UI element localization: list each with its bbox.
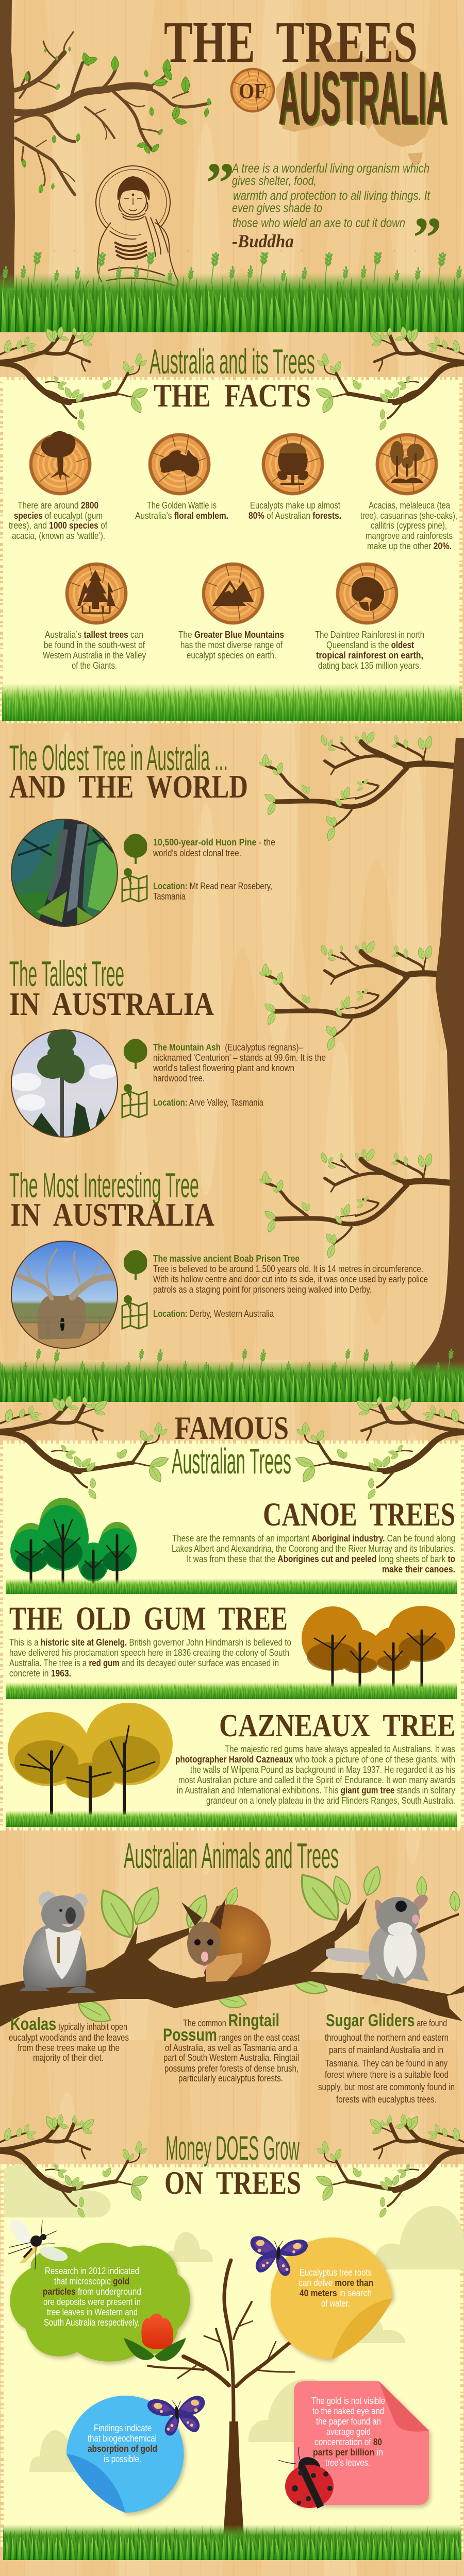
text: Eucalypts make up almost [250,500,340,511]
bubble: research: South Australia respectively. [44,2317,140,2328]
bubble: gold concentration [294,2381,429,2505]
grass band [3,2524,461,2560]
icon: butterfly [250,2229,311,2280]
bubble: findings: absorption of gold [88,2444,157,2454]
map of Australia behind title [276,40,434,166]
leaves [74,1864,461,2028]
fact: eucalypts 80 percent [248,433,341,521]
illustration: yellow trees [8,1703,173,1814]
heading: THE OLD GUM TREE [9,1600,288,1637]
log badge: of [230,68,275,112]
heading: on trees: ON TREES [164,2164,301,2201]
text: concrete in 1963. [9,1668,71,1679]
branch: most interesting tree [258,1147,461,1259]
block: tallest tree [9,954,326,1138]
log badge: of: OF [239,80,267,104]
text: callitris (cypress pine), [371,520,447,531]
bubble: roots: Eucalyptus tree roots [300,2267,372,2278]
text: boab prison tree: patrols as a staging point for prisoners being walked into Derby. [153,1284,372,1295]
bubble: gold concentration: concentration of 80 [314,2437,382,2447]
branches left and right [0,326,464,431]
tree with branches at left [0,0,211,289]
icon: tree [29,431,91,495]
text: location: Location: Derby, Western Australia [153,1309,274,1319]
photo: boab prison tree [10,1241,119,1349]
text: make their canoes. [382,1564,455,1574]
text: Queensland is the oldest [326,640,414,650]
block: oldest tree [9,738,275,927]
bubble: findings: that biogeochemical [88,2433,157,2444]
quotation marks: ” [413,206,442,270]
text: Western Australia in the Valley [43,650,146,660]
text: be found in the south-west of [44,640,145,650]
old gum tree [6,1600,457,1699]
grass band [6,1579,457,1594]
branch: tallest tree [258,940,461,1052]
subheading: IN AUSTRALIA [10,1197,214,1233]
text [315,630,424,671]
text: location: Tasmania [153,891,186,902]
text [43,630,146,671]
animal: sugar glider [326,1895,429,1984]
text: The Golden Wattle is [147,500,217,511]
text: mountain ash: hardwood tree. [153,1073,205,1083]
section: intro header [0,0,464,332]
text [360,500,457,551]
bubble: research: that microscopic gold [54,2276,129,2286]
bubble: findings: is possible. [104,2454,141,2464]
icon: map [122,1084,147,1117]
icon: ladybird [278,2447,334,2508]
text: boab prison tree [153,1253,428,1295]
text: ringtail possum: The common Ringtail [183,2011,279,2030]
bubble: research: Research in 2012 indicated [45,2266,139,2276]
icon: tree [124,1039,147,1069]
photo: huon pine [10,819,119,927]
text: mountain ash: nicknamed 'Centurion' – stands at 99.6m. It is the [153,1053,326,1063]
quotation marks: ” [206,151,235,215]
quote text: even gives shade to [232,201,322,215]
quote text: gives shelter, food, [232,174,317,188]
block: most interesting tree [9,1166,428,1349]
clouds [4,2165,464,2472]
bubble: gold concentration: to the naked eye and [312,2406,384,2416]
fact: tallest trees [43,563,146,671]
bubble: gold concentration: parts per billion in [313,2447,383,2458]
text: location: Location: Mt Read near Rosebery, [153,881,272,891]
block: most interesting tree: The Most Interesting Tree [9,1166,199,1205]
icon: globe [336,563,398,624]
fact: daintree rainforest [315,563,424,671]
text: koalas: from these trees make up the [18,2043,120,2053]
text [9,1637,291,1679]
icon: mountains [202,563,264,624]
heading: famous: FAMOUS [175,1410,289,1446]
big branch [0,1898,464,2027]
bubble: research: ore deposits were present in [43,2297,141,2307]
center tree [148,2260,294,2558]
cazneaux tree [6,1703,457,1827]
bubble: findings [67,2396,184,2513]
grass band [0,1349,464,1402]
animal: koala [20,1891,96,1993]
section: animals and trees [0,1836,464,2105]
text: The Greater Blue Mountains [178,630,284,640]
text: has the most diverse range of [180,640,283,650]
text: koalas: eucalypt woodlands and the leaves [9,2032,129,2043]
fact: other species [360,433,457,551]
text [135,500,228,521]
text: huon pine: world's oldest clonal tree. [153,848,241,858]
bubble: roots: can delve more than [299,2278,373,2288]
text: Australia. The tree is a red gum and its decayed outer surface was encased in [9,1658,279,1668]
block: tallest tree: The Tallest Tree [9,954,124,994]
subheading: AND THE WORLD [9,769,248,805]
text [172,1533,455,1574]
text: Australia’s floral emblem. [135,511,228,521]
text: ringtail possum: particularly eucalyptus forests. [178,2073,283,2083]
text: huon pine [153,837,275,858]
subheading: IN AUSTRALIA [9,986,214,1022]
text: ringtail possum [163,2011,300,2083]
text: sugar gliders: forests with eucalyptus trees. [336,2094,437,2105]
photo: mountain ash [10,1028,119,1138]
branches left and right [0,2114,464,2219]
text: huon pine: 10,500-year-old Huon Pine - the [153,837,275,848]
text: boab prison tree: The massive ancient Boab Prison Tree [153,1253,300,1264]
text: koalas [9,2014,129,2063]
fact: golden wattle [135,433,228,521]
text: species of eucalypt (gum [14,511,103,521]
text: tropical rainforest on earth, [316,650,423,660]
grass band [0,250,464,332]
text: have delivered his proclamation speech here in 1836 creating the colony of South [9,1648,289,1658]
text: make up the other 20%. [367,541,452,551]
text: in Australian and International exhibitions. This giant gum tree stands in solitary [177,1785,455,1795]
text: of the Giants. [72,660,117,671]
text: It was from these that the Aborigines cut and peeled long sheets of bark to [187,1554,455,1564]
quote text [231,161,430,230]
fact: eucalypt species [9,431,108,541]
panel: the facts [0,326,464,721]
icon: map [122,1295,147,1329]
text: sugar gliders: Sugar Gliders are found [326,2011,447,2030]
bubble: roots [271,2238,392,2359]
grass band [2,683,462,721]
icon: Australia map [148,433,210,495]
cream panel [3,1444,461,1827]
heading: the facts: THE FACTS [154,377,311,414]
text [175,1744,455,1806]
grass band [6,1682,457,1699]
text: ringtail possum: part of South Western Australia. Ringtail [163,2053,299,2063]
text: location: Location: Arve Valley, Tasmania [153,1097,264,1108]
text: ringtail possum: Possum ranges on the east coast [163,2025,300,2045]
buddha figure [86,166,178,299]
text: trees), and 1000 species of [9,520,108,531]
text: ringtail possum: possums prefer forests of dense brush, [164,2063,299,2074]
animal: possum [181,1899,271,1982]
text: eucalypt species on earth. [187,650,276,660]
section: record trees with trunk [0,730,464,1402]
bubble: research: tree leaves in Western and [47,2307,138,2317]
text: mountain ash [153,1042,326,1083]
quotation marks [206,151,442,270]
illustration: green trees [10,1498,137,1583]
cream panel [3,380,459,720]
bubble: gold concentration: tree’s leaves. [325,2458,370,2468]
bubble: roots: 40 meters in search [300,2288,372,2298]
quote text: those who wield an axe to cut it down [233,216,405,230]
text: sugar gliders [318,2011,455,2105]
branch: oldest tree [258,730,461,842]
text: Australia’s tallest trees can [45,630,143,640]
bubble: findings: Findings indicate [94,2423,152,2433]
panel: famous Australian trees [0,1395,464,1827]
icon: map [122,868,147,902]
text: koalas: majority of their diet. [33,2053,104,2063]
icon: pines [65,563,127,624]
cream panel [4,2167,460,2549]
bubble: gold concentration: average gold [326,2427,371,2437]
panel: money does grow on trees [0,2114,464,2560]
text: dating back 135 million years. [318,660,421,671]
panel: famous Australian trees: Australian Trees [172,1441,291,1481]
trunk at right [405,738,464,1381]
bubble: gold concentration: the paper found an [316,2416,381,2427]
icon: eucalypt tree [262,433,324,495]
text [248,500,341,521]
text: The Daintree Rainforest in north [315,630,424,640]
grass band [6,1810,457,1827]
panel: money does grow on trees: Money DOES Grow [165,2129,300,2167]
text: mountain ash: The Mountain Ash (Eucalyptus regnans)– [153,1042,303,1053]
bubble: research [10,2243,190,2362]
canoe trees [6,1496,457,1594]
text [178,630,284,660]
text: location [153,881,272,902]
bubble: roots: of water. [321,2298,350,2309]
bubble: research: particles from underground [43,2286,141,2297]
branches left and right [0,1395,464,1500]
text: mountain ash: world's tallest flowering plant and known [153,1063,294,1073]
quote attribution: -Buddha [232,231,294,251]
text: These are the remnants of an important Aboriginal industry. Can be found along [172,1533,455,1544]
text: ringtail possum: of Australia, as well as Tasmania and a [165,2043,298,2053]
icon: butterfly [144,2389,206,2440]
icon: tulip [124,2314,186,2361]
illustration: orange trees [302,1606,455,1686]
icon: bee [6,2216,69,2269]
icon: tree [124,1250,147,1280]
text: sugar gliders: parts of mainland Australia and in [329,2045,443,2055]
text: acacia, (known as ‘wattle’). [12,531,105,541]
icon: tree [124,834,147,864]
text: There are around 2800 [18,500,98,511]
fact: blue mountains [178,563,284,660]
text: 80% of Australian forests. [248,511,341,521]
text: This is a historic site at Glenelg. British governor John Hindmarsh is believed to [9,1637,291,1648]
bubble: gold concentration: The gold is not visible [311,2396,385,2406]
icon: three trees [376,433,438,495]
text: koalas: Koalas typically inhabit open [10,2014,127,2034]
text [9,500,108,541]
